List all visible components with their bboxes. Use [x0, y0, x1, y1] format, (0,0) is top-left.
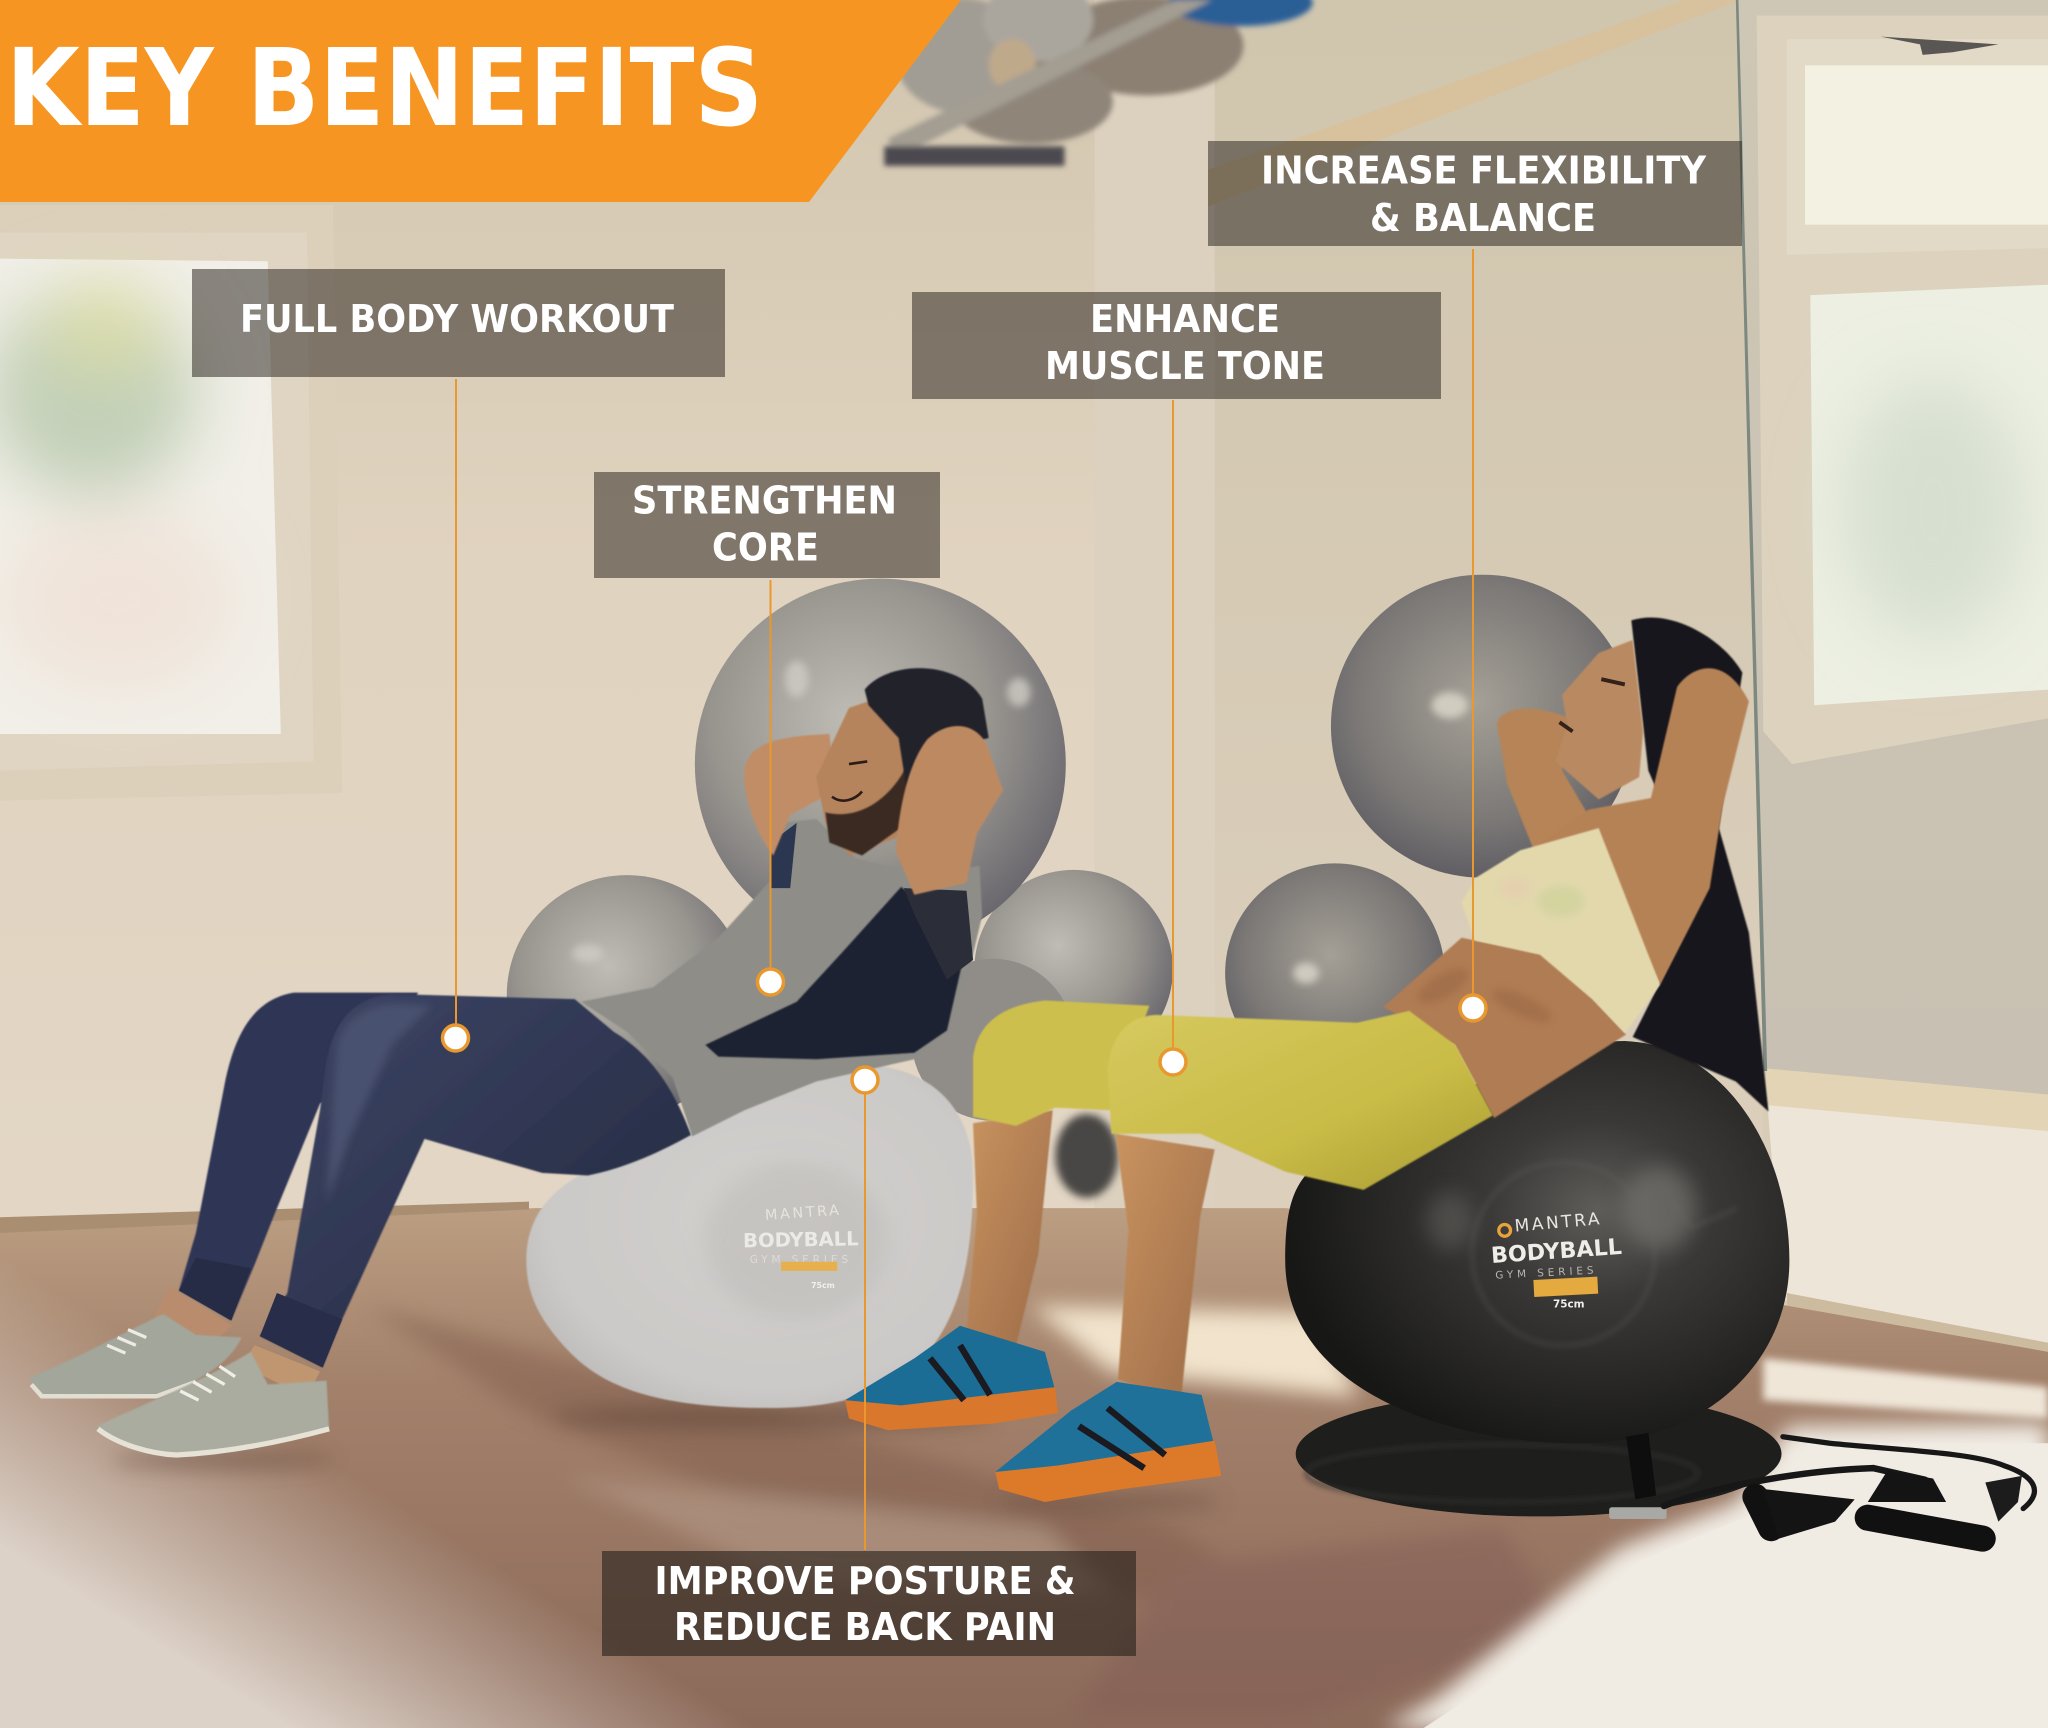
woman: belly: [1383, 938, 1626, 1118]
marker: full body: [442, 1025, 468, 1051]
callout: full body workout: FULL BODY WORKOUT: [240, 297, 675, 342]
silver exercise ball: [526, 1064, 973, 1408]
callout: improve posture and reduce back pain: REDUCE BACK PAIN: [674, 1605, 1056, 1650]
background balls in mirror: [1225, 575, 1634, 1083]
floor streaks: [366, 1306, 1567, 1718]
floor light: bottom right core: [1424, 1443, 2048, 1728]
mirror edge: [1736, 0, 1767, 1071]
floor light: bottom left: [0, 1234, 1306, 1728]
callout: strengthen core: STRENGTHEN: [632, 478, 897, 524]
wooden beam: [1208, 0, 1740, 206]
right window upper pane: [1805, 65, 2048, 225]
blue ball: [1169, 0, 1313, 26]
man: front arm: [896, 726, 1003, 895]
woman: chest and arm: [1528, 668, 1749, 985]
man: sleeve: [904, 888, 973, 980]
wall: left: [0, 0, 1097, 1241]
ball logo text: GYM SERIES: [750, 1254, 852, 1266]
woman: back shoe: [845, 1326, 1058, 1430]
strap buckle: [1609, 1507, 1667, 1519]
left window frame: [0, 205, 342, 801]
floor light: bottom right: [1384, 1424, 2048, 1728]
top stacked balls: [884, 0, 1313, 166]
floor: [0, 1208, 2048, 1728]
callout: strengthen core: [594, 472, 940, 995]
woman: back leg lower: [967, 1110, 1053, 1345]
baseboard: left: [0, 1202, 529, 1233]
ball logo text: 75cm: [811, 1281, 835, 1290]
wooden strip: [1766, 1068, 2048, 1131]
window foliage: [0, 281, 235, 692]
marker: flexibility: [1460, 995, 1486, 1021]
base ring: [1296, 1391, 1782, 1516]
callout: increase flexibility and balance: INCREASE FLEXIBILITY: [1261, 148, 1707, 194]
handle one: [1755, 1471, 1946, 1539]
ball logo text: BODYBALL: [1490, 1234, 1623, 1269]
woman: front lower leg: [1115, 1134, 1215, 1401]
left window glass: [0, 259, 281, 734]
ball logo text: [1490, 1209, 1623, 1310]
marker: posture: [852, 1067, 878, 1093]
man: back cuff: [179, 1258, 251, 1320]
header banner: [0, 0, 961, 202]
callout: increase flexibility and balance: [1208, 141, 1742, 1021]
man: eye and mouth: [832, 761, 867, 801]
woman: eye and lips: [1560, 679, 1625, 731]
wall: right section: [1737, 0, 2048, 1097]
ball logo text: GYM SERIES: [1495, 1264, 1598, 1282]
man: face: [816, 686, 934, 856]
callout: enhance muscle tone: MUSCLE TONE: [1045, 344, 1325, 389]
ball logo text: [743, 1203, 859, 1290]
ball logo text: BODYBALL: [743, 1227, 859, 1252]
ball logo text: MANTRA: [765, 1203, 842, 1224]
man: back leg: [179, 993, 418, 1320]
shelf bar: [888, 0, 1212, 159]
left window inner frame: [0, 232, 313, 771]
marker: muscle: [1160, 1049, 1186, 1075]
woman: front shoe: [995, 1382, 1221, 1502]
man: front cuff: [260, 1293, 342, 1368]
marker: core: [758, 969, 784, 995]
woman: back thigh: [973, 1000, 1149, 1126]
callout: increase flexibility and balance: & BALANCE: [1370, 196, 1596, 241]
wall: lower right: [1766, 1084, 2048, 1358]
woman: ab shadow: [1413, 962, 1556, 1029]
shelf bracket: [884, 146, 1064, 166]
sunlit strip: right: [1763, 1358, 2048, 1418]
man: back arm: [744, 734, 836, 856]
wall: central pillar: [1095, 0, 1217, 1241]
callout: improve posture and reduce back pain: IMPROVE POSTURE &: [654, 1559, 1076, 1604]
callout: enhance muscle tone: ENHANCE: [1090, 297, 1280, 342]
background balls behind man: [507, 579, 1173, 1198]
wall: mirror section: [1215, 0, 1763, 1215]
sunlit strip: centre: [1032, 1306, 1358, 1398]
right window frame: [1757, 16, 2048, 764]
man: collar panel: [771, 823, 797, 888]
handle two: [1868, 1476, 2022, 1539]
woman: face: [1556, 640, 1643, 799]
man: trouser highlight: [327, 1003, 431, 1202]
man: beard: [825, 764, 908, 856]
resistance band: [1664, 1437, 2034, 1509]
man: shirt dark panel: [705, 887, 967, 1059]
black exercise ball: [1285, 1041, 1789, 1443]
ball logo text: 75cm: [1553, 1298, 1585, 1310]
man: front leg: [260, 994, 691, 1368]
right window lower pane: [1810, 285, 2048, 705]
right window blind mount: [1881, 37, 1998, 55]
man: ankles: [154, 1287, 320, 1398]
man: front shoe: [97, 1352, 329, 1455]
ball logo text: MANTRA: [1514, 1209, 1603, 1237]
right window pane divider: [1787, 39, 2048, 255]
woman: leggings: [1108, 1011, 1493, 1190]
callout: strengthen core: CORE: [712, 526, 819, 570]
baseboard: right: [1787, 1293, 2048, 1356]
man: back shoe: [29, 1314, 242, 1398]
floor shadows: [111, 1404, 1221, 1510]
title: KEY BENEFITS: [6, 27, 763, 151]
callout: full body workout: [192, 269, 725, 1051]
woman: hair: [1631, 617, 1768, 1112]
woman: back arm: [1497, 709, 1588, 849]
ball highlights: [572, 661, 1031, 963]
man: shirt: [581, 819, 982, 1136]
callout: enhance muscle tone: [912, 292, 1441, 1075]
man: hair: [865, 668, 989, 797]
woman: bra: [1462, 828, 1660, 1033]
callout: improve posture and reduce back pain: [602, 1067, 1136, 1656]
base strap: [1626, 1433, 1656, 1499]
